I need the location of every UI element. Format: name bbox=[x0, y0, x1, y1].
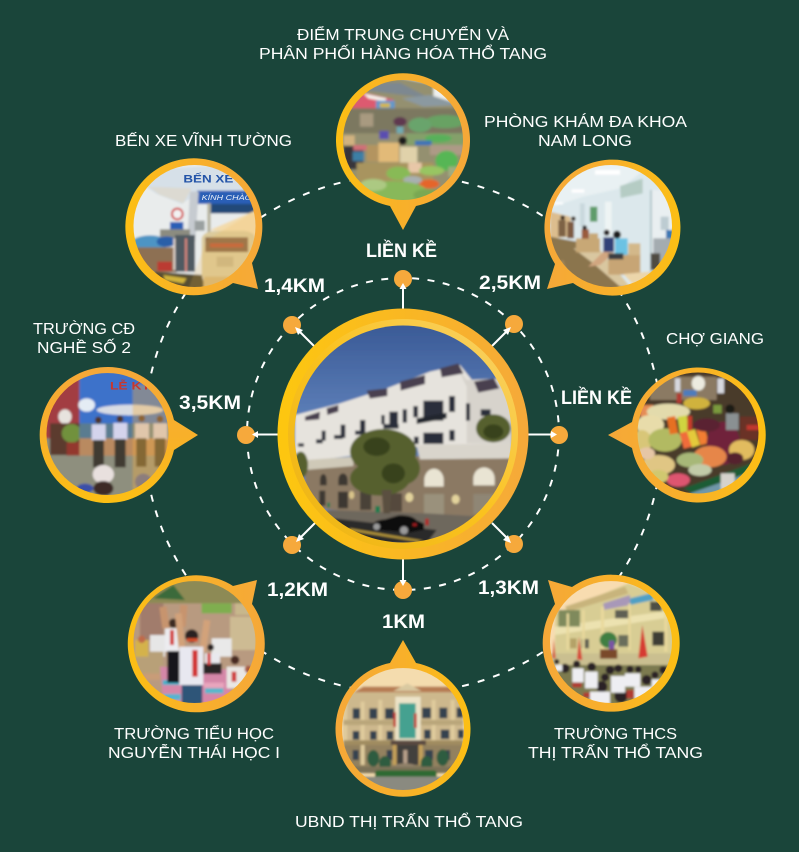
label: Nam Long clinic bbox=[484, 112, 687, 150]
distance: right adjacent: LIỀN KỀ bbox=[561, 387, 632, 409]
pin: Vinh Tuong bus station photo: KÍNH CHÀO bbox=[202, 193, 252, 202]
label: Nam Long clinic: NAM LONG bbox=[538, 133, 632, 150]
label: transfer and distribution point: ĐIỂM TRUNG CHUYỂN VÀ bbox=[297, 25, 509, 44]
label: Giang market: CHỢ GIANG bbox=[666, 331, 764, 348]
distance labels bbox=[179, 240, 632, 633]
label: transfer and distribution point bbox=[259, 25, 547, 63]
pin: Vocational College No. 2 ceremony photo bbox=[40, 367, 198, 505]
pin: Giang market fruit photo bbox=[608, 368, 767, 503]
label: vocational college no. 2: NGHỀ SỐ 2 bbox=[37, 337, 131, 357]
label: Vinh Tuong bus station: BẾN XE VĨNH TƯỜNG bbox=[115, 130, 292, 150]
central building photo with gold ring bbox=[278, 308, 528, 560]
distance: 3.5 km: 3,5KM bbox=[179, 393, 241, 414]
distance: 1.4 km: 1,4KM bbox=[264, 276, 325, 297]
distance: 1.3 km: 1,3KM bbox=[478, 578, 539, 599]
label: vocational college no. 2 bbox=[33, 319, 135, 357]
distance: 2.5 km: 2,5KM bbox=[479, 273, 541, 294]
pin: Tho Tang town hall photo bbox=[336, 640, 470, 797]
pin: Nguyen Thai Hoc primary school photo bbox=[128, 575, 265, 712]
label: Nguyen Thai Hoc primary school: NGUYỄN THÁI HỌC I bbox=[108, 743, 280, 762]
pin: Nam Long clinic photo bbox=[544, 160, 680, 297]
connector arrows and dots bbox=[237, 270, 568, 599]
distance: 1 km: 1KM bbox=[382, 612, 425, 633]
distance: top adjacent: LIỀN KỀ bbox=[366, 240, 437, 262]
label: transfer and distribution point: PHÂN PHỐI HÀNG HÓA THỔ TANG bbox=[259, 43, 547, 63]
label: Nguyen Thai Hoc primary school: TRƯỜNG TIỂU HỌC bbox=[114, 724, 274, 743]
label: Tho Tang secondary school bbox=[528, 724, 703, 762]
label: Tho Tang town committee: UBND THỊ TRẤN THỔ TANG bbox=[295, 812, 523, 831]
distance: 1.2 km: 1,2KM bbox=[267, 580, 328, 601]
label: Tho Tang secondary school: TRƯỜNG THCS bbox=[554, 724, 677, 743]
label: Nguyen Thai Hoc primary school bbox=[108, 724, 280, 762]
label: Nam Long clinic: PHÒNG KHÁM ĐA KHOA bbox=[484, 112, 687, 131]
pin: Tho Tang secondary school photo bbox=[543, 575, 682, 712]
label: Tho Tang secondary school: THỊ TRẤN THỔ TANG bbox=[528, 743, 703, 762]
label: vocational college no. 2: TRƯỜNG CĐ bbox=[33, 319, 135, 338]
pin: Vinh Tuong bus station photo: BẾN XE bbox=[183, 173, 233, 186]
pin: Vocational College No. 2 ceremony photo: LỄ KỶ bbox=[110, 380, 151, 393]
pin: Vinh Tuong bus station photo bbox=[125, 158, 263, 295]
pin: transfer and distribution market photo bbox=[336, 73, 470, 230]
